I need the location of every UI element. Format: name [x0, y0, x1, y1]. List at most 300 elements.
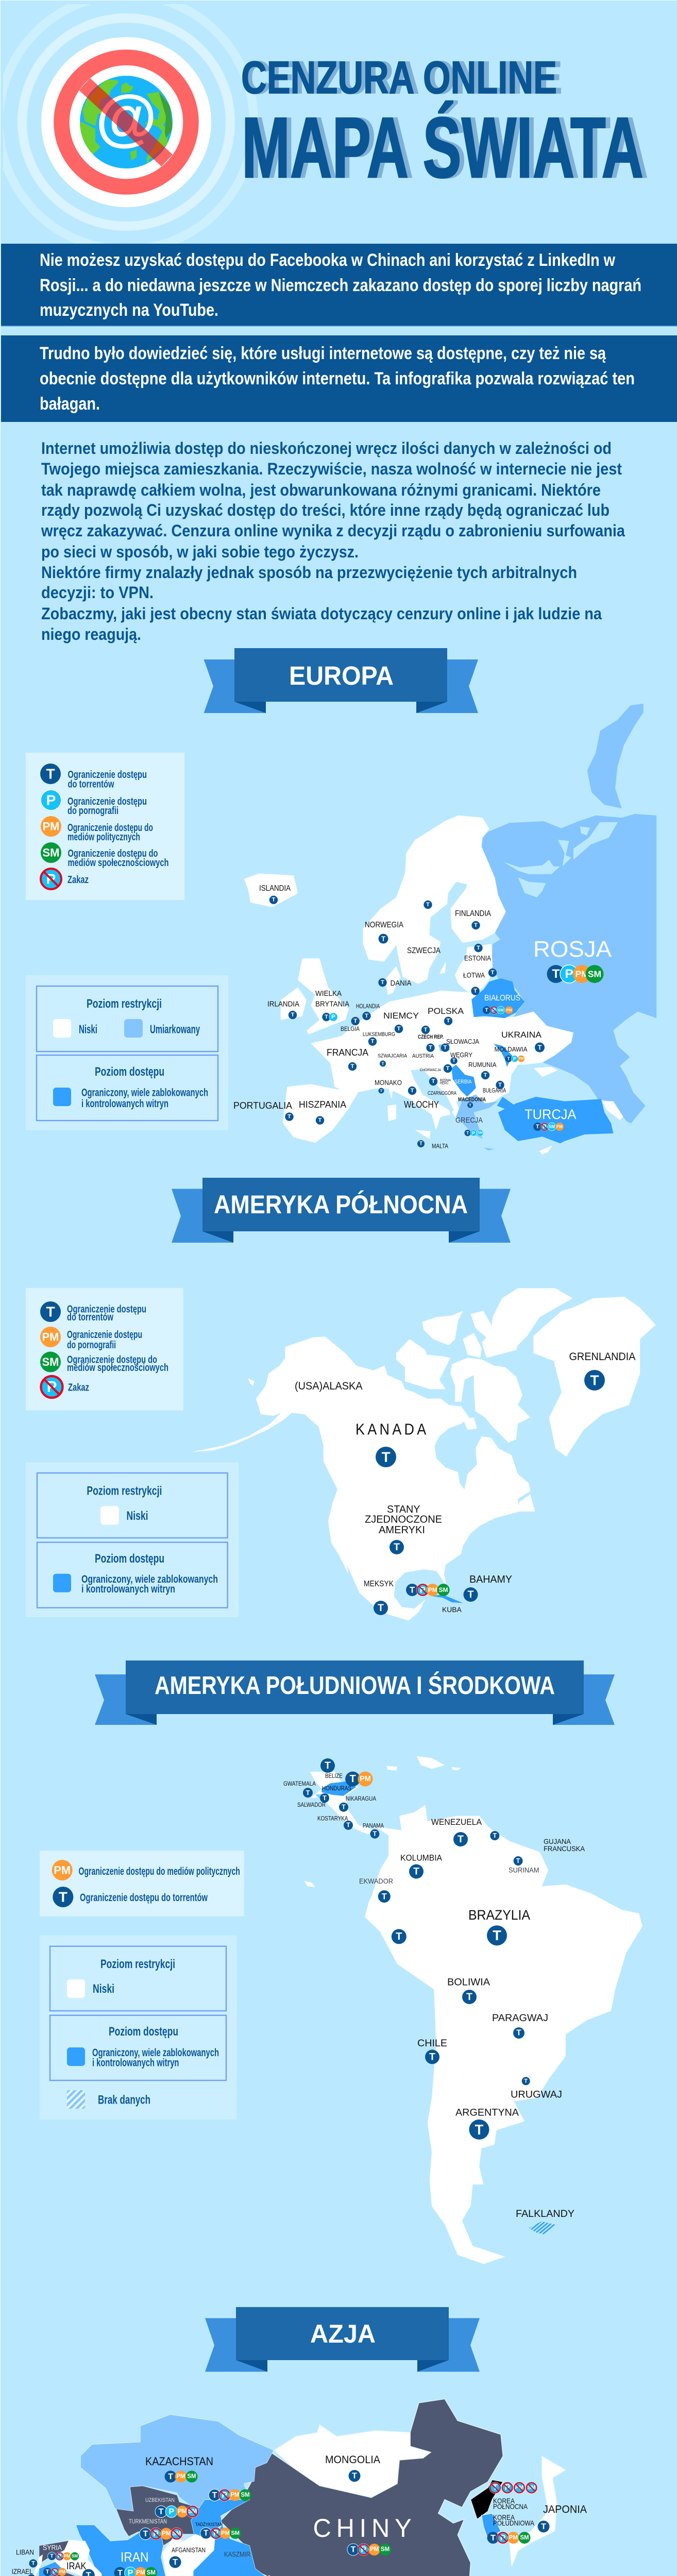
icons: Tadżykistan: PM [221, 2530, 230, 2536]
icons: Kazachstan: PM [176, 2473, 185, 2480]
title: CENZURA ONLINE [245, 52, 562, 103]
country labels: North America: STANY [387, 1504, 420, 1515]
icons: Turkmenistan: P [153, 2529, 159, 2538]
country labels: South America: EKWADOR [359, 1877, 393, 1885]
land: Tadżykistan, Kirgistan [191, 2500, 249, 2536]
country labels: Asia: IRAK [66, 2561, 87, 2572]
icons: Asia single T markers [27, 2470, 549, 2576]
land: Kazachstan [80, 2415, 274, 2511]
icons: Europe single T markers: T [325, 1014, 328, 1020]
icons: South America [303, 1758, 530, 2140]
intro panel 1 [1, 244, 677, 327]
country labels: Europe: UKRAINA [501, 1030, 542, 1040]
icons: Tadżykistan: T [204, 2529, 209, 2537]
land: Skandynawia [363, 816, 506, 984]
country labels: Europe: CHORWACJA [420, 1067, 441, 1072]
legend labels: do torrentów [68, 779, 114, 790]
icons: Europe single T markers: T [380, 1088, 383, 1093]
icons: Asia single T markers: T [173, 2557, 178, 2567]
legend labels: do pornografii [67, 805, 119, 817]
country labels: Asia [12, 2454, 587, 2576]
country labels: Asia: IRAN [121, 2549, 148, 2565]
country labels: Asia: JAPONIA [543, 2504, 587, 2515]
land: Caribbean islands [304, 1756, 461, 1887]
country labels: South America: SALWADOR [297, 1801, 326, 1808]
icons: North America: T [381, 1449, 391, 1465]
icons: South America: T [323, 1794, 327, 1802]
icons: Turkmenistan: PM [162, 2531, 171, 2537]
icons: Europe single T markers: T [419, 1141, 422, 1146]
icons: South America: T [373, 1831, 377, 1838]
icon: P [41, 790, 61, 810]
country labels: Europe: MONAKO [375, 1078, 402, 1087]
country labels: Europe: GRECJA [455, 1116, 483, 1125]
icons: Mołdawia [505, 1055, 524, 1062]
country labels: South America: WENEZUELA [431, 1817, 482, 1827]
panel: North America level legend: Ograniczony, wiele zablokowanych [81, 1573, 218, 1585]
country labels: Asia: MONGOLIA [325, 2454, 380, 2466]
panel: North America level legend: i kontrolowanych witryn [81, 1583, 175, 1595]
land: Arabia Saudyjska [37, 2571, 141, 2576]
map: Asia [12, 2399, 587, 2576]
icons: Kirgistan: PM [230, 2492, 240, 2498]
icon: banned P [41, 869, 61, 889]
land: Falklandy [529, 2222, 556, 2234]
country labels: Europe: RUMUNIA [468, 1061, 497, 1069]
icons: Turkmenistan: SM [172, 2531, 181, 2537]
country labels: Europe: FINLANDIA [455, 909, 491, 918]
icons: Kazachstan: T [168, 2472, 173, 2481]
icons: Białoruś [483, 1006, 513, 1014]
country labels: Europe: FRANCJA [327, 1047, 369, 1058]
panel: South America level legend: i kontrolowanych witryn [92, 2057, 179, 2069]
icons: Europe single T markers: T [365, 1013, 368, 1019]
icons: Białoruś: P [492, 1007, 496, 1013]
panel: North America level legend [26, 1463, 239, 1617]
country labels: Europe: BIAŁORUŚ [484, 993, 520, 1003]
country labels: Europe: NORWEGIA [365, 921, 403, 929]
country labels: Europe: WĘGRY [450, 1051, 472, 1059]
country labels: Europe: LUKSEMBURG [363, 1031, 395, 1038]
country labels: South America: BELIZE [325, 1772, 343, 1780]
legend labels: Ograniczenie dostępu [67, 796, 147, 807]
banner: Europa [204, 648, 478, 713]
country labels: Asia: SYRIA [43, 2544, 62, 2551]
country labels: South America: GWATEMALA [283, 1780, 316, 1787]
icons: Korea Południowa: PM [509, 2535, 518, 2541]
icons: North America: T [468, 1589, 474, 1600]
icons: Europe single T markers: T [452, 1058, 455, 1063]
country labels: Europe: AUSTRIA [412, 1053, 434, 1059]
icons: South America: T [493, 1927, 501, 1943]
icons: North America: T [378, 1602, 384, 1614]
land: Turcja [497, 1097, 613, 1143]
country labels: North America: BAHAMY [469, 1574, 512, 1585]
intro paragraph [41, 439, 625, 643]
country labels: South America: FRANCUSKA [544, 1844, 585, 1853]
icons: South America: T [346, 1822, 350, 1829]
icons: Europe single T markers: T [370, 1039, 375, 1045]
country labels: South America: ARGENTYNA [455, 2108, 519, 2119]
land: Korea Północna [470, 2480, 503, 2519]
icons: Kirgistan: SM [241, 2492, 250, 2498]
intro paragraph: wręcz zakazywać. Cenzura online wynika z decyzji rządu o zabronieniu surfowania [41, 521, 625, 540]
icons: Kirgistan: T [212, 2490, 217, 2500]
icons: Europe single T markers: T [490, 970, 495, 976]
icons: Europe single T markers: T [272, 897, 276, 903]
icons: Kuba: SM [439, 1586, 448, 1594]
panel: North America level legend: Poziom restrykcji [87, 1484, 162, 1498]
icons: Korea Północna: T [493, 2483, 498, 2492]
intro panel 1: muzycznych na YouTube. [40, 300, 218, 320]
intro panel 2: bałagan. [40, 394, 100, 414]
icon: T: T [59, 1889, 67, 1905]
icons: Iran [114, 2567, 157, 2576]
legend labels: mediów społecznościowych [67, 1362, 168, 1374]
icons: Europe single T markers: T [381, 935, 385, 942]
country labels: North America: (USA)ALASKA [295, 1380, 363, 1392]
icon: SM: SM [42, 846, 60, 859]
icons: Turkmenistan: T [143, 2529, 148, 2538]
land: Alaska, Kanada, USA, Meksyk [192, 1336, 530, 1620]
icons: Syria: T [50, 2553, 54, 2560]
legend labels: mediów społecznościowych [68, 857, 169, 869]
banner: Azja [205, 2307, 480, 2372]
icons: Grecja: P [472, 1130, 475, 1136]
land: Uzbekistan, Turkmenistan [116, 2486, 202, 2546]
country labels: Europe: MOŁDAWIA [495, 1045, 528, 1053]
icons: Kuba: PM [428, 1586, 437, 1594]
icons: Korea Północna: P [505, 2483, 510, 2492]
icons: South America: T [325, 1760, 331, 1771]
legend labels: Ograniczenie dostępu do torrentów [80, 1892, 208, 1904]
country labels: Europe: WIELKA [315, 989, 342, 998]
icons: Europe single T markers: T [424, 1027, 428, 1033]
icons: South America: T [429, 2051, 435, 2062]
country labels: Asia: AFGANISTAN [172, 2546, 206, 2554]
icons: Syria: PM [64, 2554, 70, 2558]
icons: South America: T [396, 1931, 402, 1942]
icons: Asia single T markers: T [31, 2560, 35, 2567]
country labels: Europe: BUŁGARIA [483, 1087, 506, 1094]
country labels: Europe: ROSJA [533, 937, 612, 962]
map: North America [192, 1289, 656, 1620]
intro paragraph: Twojego miejsca zamieszkania. Rzeczywiście, nasza wolność w internecie nie jest [41, 460, 622, 478]
icons: Korea Południowa [487, 2532, 531, 2544]
icons: Europe single T markers: T [443, 1045, 447, 1051]
land: Rosja [481, 814, 656, 1123]
country labels: Europe: TURCJA [524, 1107, 576, 1122]
icons: Turcja [533, 1123, 564, 1131]
icons: Europe single T markers: T [498, 1082, 502, 1088]
country labels: Europe: NIEMCY [383, 1011, 419, 1021]
banner: Europa: EUROPA [289, 661, 394, 690]
icons: Białoruś: SM [498, 1008, 504, 1012]
icons: South America: T [524, 2078, 528, 2084]
icons: Europe single T markers: T [353, 1018, 357, 1024]
icons: Turcja: SM [549, 1124, 555, 1129]
country labels: Europe: MALTA [432, 1143, 448, 1150]
icons: Kazachstan: SM [187, 2473, 196, 2480]
icons: Europe single T markers: T [287, 1114, 291, 1120]
country labels: South America: NIKARAGUA [346, 1795, 376, 1802]
country labels: South America: URUGWAJ [511, 2090, 562, 2100]
icons: Kazachstan [165, 2471, 198, 2482]
panel: Europe icon legend [26, 753, 184, 900]
icon: PM: PM [42, 1330, 59, 1344]
country labels: South America: KOSTARYKA [317, 1815, 348, 1822]
legend labels [78, 1866, 240, 1904]
icons: Tadżykistan: P [213, 2529, 218, 2537]
icon: T [53, 1887, 73, 1907]
icons: Tadżykistan [200, 2528, 241, 2539]
icon: SM [41, 842, 61, 863]
panel: South America level legend: Ograniczony, wiele zablokowanych [92, 2047, 219, 2059]
icons: Turcja: P [543, 1124, 547, 1130]
panel: South America level legend: Niski [93, 1982, 114, 1996]
icons: Grecja: SM [478, 1131, 483, 1134]
icons: Chiny: PM [370, 2547, 379, 2553]
icons: Grecja [464, 1130, 483, 1136]
icons: Europe single T markers: P [331, 1014, 335, 1020]
land: Korea Południowa [481, 2513, 501, 2539]
icon: banned P: P [47, 1378, 57, 1396]
icons: Uzbekistan: T [159, 2507, 164, 2516]
icon: PM [52, 1860, 73, 1880]
land: Afganistan [162, 2534, 215, 2576]
country labels: South America: GUJANA [544, 1837, 571, 1845]
country labels: Europe: POLSKA [428, 1006, 464, 1016]
country labels: South America: PANAMA [363, 1823, 384, 1829]
legend labels: mediów politycznych [67, 832, 140, 843]
country labels: Asia: TADŻYKISTAN [195, 2522, 223, 2528]
land: Europa Środkowa i Wschodnia [385, 944, 623, 1155]
intro paragraph: niego reagują. [41, 625, 141, 643]
intro panel 2 [1, 335, 677, 422]
icons: Europe single T markers: T [431, 1078, 435, 1084]
country labels: North America: MEKSYK [364, 1580, 394, 1588]
icons: Europe single T markers: T [469, 1103, 471, 1108]
country labels: Europe: WŁOCHY [404, 1099, 439, 1110]
icon: SM [40, 1352, 61, 1372]
panel: South America icon legend [40, 1851, 244, 1917]
country labels: Europe: CZARNOGÓRA [428, 1090, 456, 1096]
land: Nowa Ziemia [587, 704, 644, 808]
legend labels: Ograniczenie dostępu [67, 1303, 146, 1315]
legend labels: Ograniczenie dostępu do [67, 1354, 157, 1366]
legend labels: Ograniczenie dostępu do mediów politycznych [78, 1866, 240, 1877]
intro paragraph: Niektóre firmy znalazły jednak sposób na przezwyciężenie tych arbitralnych [41, 563, 577, 582]
icons: Europe single T markers: T [483, 1072, 487, 1078]
icons: South America: T [342, 1804, 346, 1811]
land: Japonia [510, 2456, 566, 2567]
icons: South America: T [516, 2029, 521, 2037]
icons: Korea Południowa: P [500, 2533, 506, 2543]
icons: Uzbekistan: P [168, 2507, 174, 2516]
country labels: Asia: KOREA [493, 2513, 515, 2521]
icons: South America: T [349, 1773, 356, 1785]
icon: crossed-out globe logo with halo [0, 0, 253, 249]
country labels: Europe: BOŚNIA [440, 1078, 451, 1082]
icons: Europe single T markers: T [410, 1088, 414, 1094]
country labels: Europe: HOLANDIA [356, 1004, 380, 1010]
country labels: Asia: KOREA [493, 2497, 515, 2505]
icon: T: T [46, 1303, 55, 1320]
country labels: Asia: LIBAN [16, 2549, 34, 2556]
icons: Europe single T markers [269, 895, 545, 1147]
country labels: Europe: DANIA [391, 979, 411, 988]
legend labels: Ograniczenie dostępu do [68, 848, 158, 859]
intro paragraph: Internet umożliwia dostęp do nieskończonej wręcz ilości danych w zależności od [41, 439, 612, 457]
land: Chiny [220, 2399, 503, 2576]
country labels: North America: KANADA [356, 1420, 429, 1438]
icons: Europe single T markers: T [429, 1045, 432, 1051]
icons: Europe single T markers: T [446, 1018, 450, 1024]
icons: Europe single T markers: T [397, 1026, 401, 1032]
icons: Rosja [547, 965, 604, 983]
icons: South America: T [466, 1991, 472, 2003]
banner: Ameryka Północna: AMERYKA PÓŁNOCNA [214, 1190, 468, 1219]
land: Grenlandia [533, 1297, 656, 1456]
icons: Kirgistan: P [222, 2490, 227, 2500]
legend labels: Ograniczenie dostępu [67, 1329, 142, 1341]
banner: Ameryka Północna [172, 1178, 511, 1243]
icons: Europe single T markers: T [477, 945, 480, 951]
icons: Iran: SM [147, 2570, 156, 2576]
title [241, 52, 648, 196]
country labels: North America: GRENLANDIA [569, 1351, 636, 1363]
icons: Europe single T markers: T [473, 988, 477, 994]
icons: Turkmenistan [140, 2528, 182, 2540]
icons: Kuba [406, 1584, 450, 1596]
country labels: Asia: POŁUDNIOWA [493, 2519, 535, 2527]
land: Arctic islands [248, 1289, 572, 1512]
legend labels: do pornografii [67, 1340, 116, 1351]
icon: PM: PM [54, 1864, 71, 1876]
country labels: Europe: IRLANDIA [267, 1000, 299, 1009]
panel: North America icon legend [26, 1288, 183, 1411]
country labels: South America: CHILE [417, 2038, 447, 2049]
icons: Asia single T markers: T [352, 2471, 357, 2481]
land: Mongolia [274, 2425, 431, 2498]
country labels: Europe: ISLANDIA [259, 884, 291, 893]
icons: South America: T [475, 2122, 484, 2138]
icons: Syria: SM [72, 2554, 78, 2558]
country labels: Asia: PÓŁNOCNA [493, 2502, 528, 2511]
icons: Białoruś: PM [506, 1008, 512, 1012]
icons: Europe single T markers: T [350, 1063, 354, 1070]
icons: Jordania: PM [59, 2569, 65, 2574]
icons: Rosja: SM [588, 969, 601, 979]
country labels: Europe: SŁOWACJA [446, 1038, 479, 1045]
icons: Jordania [43, 2568, 66, 2576]
intro paragraph: tak naprawdę całkiem wolna, jest obwarunkowana różnymi granicami. Niektóre [41, 481, 601, 499]
icon: PM [41, 816, 61, 837]
icons: Korea Północna [489, 2482, 537, 2494]
icons: South America: T [458, 1834, 464, 1845]
icons: Kuba: P [420, 1585, 426, 1595]
land: Nepal, Bhutan, Bangladesz, Sri Lanka [263, 2575, 324, 2576]
icon: T [40, 1301, 61, 1322]
country labels: North America: KUBA [442, 1605, 462, 1614]
icon: banned P: P [46, 871, 56, 887]
icons: Rosja: PM [575, 969, 589, 979]
panel: South America level legend: Brak danych [98, 2093, 150, 2107]
land: Iran, Pakistan, Indie [76, 2525, 358, 2576]
icons: Korea Południowa: T [490, 2533, 496, 2543]
icon: crossed-out globe logo with halo: @ [96, 82, 157, 152]
icons: Uzbekistan [155, 2506, 198, 2517]
land: Europa Zachodnia [244, 873, 458, 1143]
panel: Europe level legend: i kontrolowanych witryn [81, 1098, 168, 1110]
icons: Asia single T markers: T [541, 2522, 546, 2531]
country labels: Europe: PORTUGALIA [233, 1100, 292, 1111]
icons: Rosja: P [565, 967, 573, 981]
country labels: Asia: IZRAEL [12, 2568, 33, 2575]
legend labels: Ograniczenie dostępu [68, 769, 147, 781]
banner: Ameryka Południowa i Środkowa: AMERYKA POŁUDNIOWA I ŚRODKOWA [155, 1671, 555, 1700]
icon: T: T [46, 766, 55, 782]
panel: South America level legend: Poziom dostępu [109, 2025, 178, 2039]
icons: North America: T [590, 1372, 599, 1388]
icons: Chiny: T [351, 2545, 356, 2554]
map: Europe [233, 704, 656, 1155]
panel: Europe level legend: Poziom restrykcji [87, 997, 162, 1011]
country labels: Europe: HERC. [440, 1082, 449, 1085]
country labels: South America [283, 1772, 585, 2219]
icons: North America: T [394, 1541, 400, 1553]
country labels: Europe: SZWECJA [407, 946, 441, 955]
icons: Mołdawia: P [513, 1056, 516, 1061]
intro paragraph: rządy pozwolą Ci uzyskać dostęp do treści, które inne rządy będą ograniczać lub [41, 501, 610, 519]
country labels: South America: PARAGWAJ [492, 2013, 548, 2024]
legend labels: Zakaz [67, 874, 89, 886]
panel: Europe level legend: Ograniczony, wiele zablokowanych [81, 1087, 208, 1098]
icons: Rosja: T [552, 967, 560, 981]
land: Białoruś [471, 978, 524, 1018]
icons: South America: T [413, 1866, 419, 1877]
country labels: Europe: BRYTANIA [315, 1000, 349, 1009]
country labels: Europe: HISZPANIA [299, 1099, 346, 1110]
icons: South America: PM [360, 1775, 371, 1783]
icons: South America: T [306, 1789, 310, 1797]
icons: Jordania: P [53, 2569, 57, 2575]
country labels: South America: FALKLANDY [516, 2209, 574, 2219]
panel: Europe level legend [26, 975, 228, 1130]
icons: North America [374, 1370, 605, 1615]
icon: P: P [46, 792, 56, 808]
land: Central America [310, 1772, 380, 1836]
country labels: North America: ZJEDNOCZONE [365, 1514, 442, 1526]
icons: Białoruś: T [485, 1007, 488, 1013]
land: South America [365, 1805, 642, 2264]
country labels: Asia: KASZMIR [224, 2550, 250, 2558]
icons: Mołdawia: T [507, 1056, 510, 1061]
icons: Europe single T markers: T [474, 922, 478, 928]
icons: Syria: P [58, 2553, 62, 2560]
country labels: North America [295, 1351, 636, 1614]
country labels: Asia: CHINY [313, 2514, 416, 2543]
icons: Mołdawia: PM [519, 1057, 523, 1060]
country labels: North America: AMERYKI [379, 1524, 425, 1536]
banner: Azja: AZJA [310, 2319, 376, 2348]
icons: Europe single T markers: T [291, 1012, 295, 1018]
icons: Korea Północna: PM [515, 2485, 523, 2491]
icons: Tadżykistan: SM [231, 2530, 240, 2536]
icons: Grecja: T [466, 1130, 469, 1136]
country labels: Asia: TURKMENISTAN [129, 2519, 167, 2525]
country labels: South America: BRAZYLIA [468, 1907, 530, 1923]
